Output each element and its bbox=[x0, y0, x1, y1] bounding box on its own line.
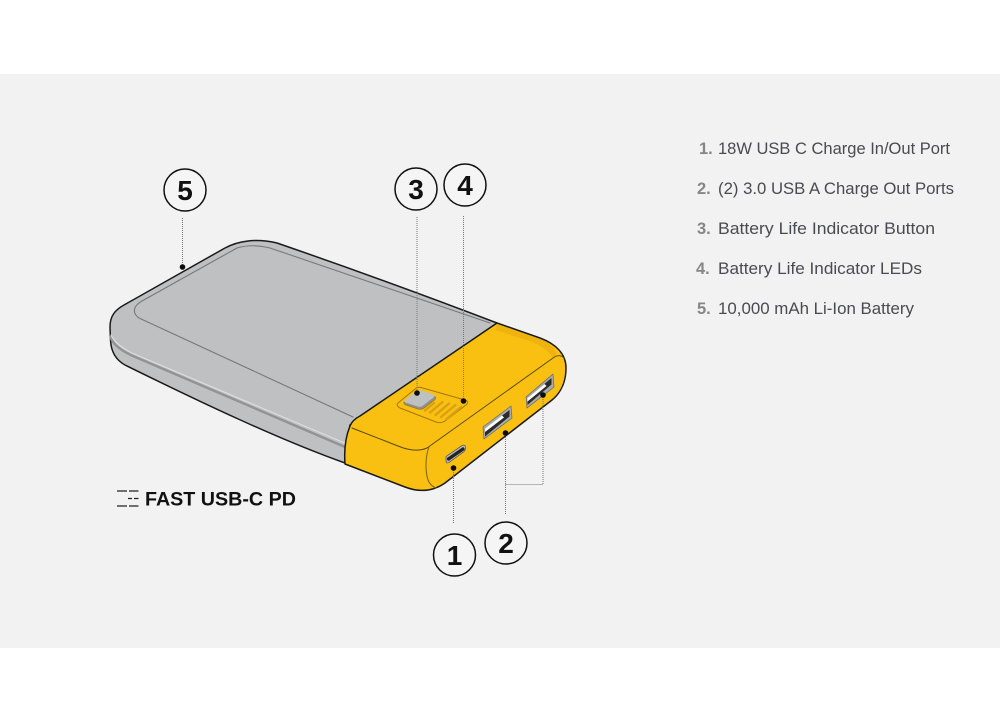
power bank illustration bbox=[110, 241, 566, 490]
leader lines bbox=[182, 216, 543, 524]
callout 4: 4 bbox=[457, 170, 473, 201]
legend item 2: 2. bbox=[697, 180, 711, 198]
fast usb-c label: FAST USB-C PD bbox=[145, 490, 296, 510]
legend item 5: 10,000 mAh Li-Ion Battery bbox=[718, 300, 915, 318]
legend item 1: 18W USB C Charge In/Out Port bbox=[718, 140, 950, 158]
callout 1 bbox=[434, 534, 476, 576]
legend item 3: 3. bbox=[697, 220, 711, 238]
LED vents bbox=[425, 402, 461, 419]
inner top panel outline bbox=[134, 246, 490, 417]
side seam bbox=[110, 335, 347, 447]
yellow end cap bbox=[345, 323, 566, 490]
callout 5 bbox=[164, 169, 206, 211]
icon: speed lines bbox=[117, 491, 138, 506]
gray body bbox=[110, 241, 497, 463]
USB-A port upper bbox=[526, 374, 554, 408]
callout 2 bbox=[485, 522, 527, 564]
USB-C port bbox=[446, 445, 466, 463]
legend item 5: 5. bbox=[697, 300, 711, 318]
yellow edge crease bbox=[352, 356, 564, 450]
legend item 4: 4. bbox=[696, 260, 710, 278]
indicator button bbox=[404, 390, 436, 409]
USB-A port lower bbox=[483, 406, 512, 439]
legend item 4: Battery Life Indicator LEDs bbox=[718, 260, 922, 278]
callout 3 bbox=[395, 168, 437, 210]
callout 3: 3 bbox=[408, 174, 424, 205]
yellow top shading bbox=[495, 324, 557, 358]
legend item 1: 1. bbox=[699, 140, 713, 158]
front face edge bbox=[426, 447, 436, 488]
leader dots bbox=[180, 264, 546, 471]
legend list bbox=[696, 140, 954, 318]
callout 2: 2 bbox=[498, 528, 514, 559]
callout 4 bbox=[444, 164, 486, 206]
button panel bbox=[397, 387, 468, 423]
callout 5: 5 bbox=[177, 175, 193, 206]
legend item 3: Battery Life Indicator Button bbox=[718, 220, 935, 238]
legend item 2: (2) 3.0 USB A Charge Out Ports bbox=[718, 180, 954, 198]
callout 1: 1 bbox=[447, 540, 462, 571]
